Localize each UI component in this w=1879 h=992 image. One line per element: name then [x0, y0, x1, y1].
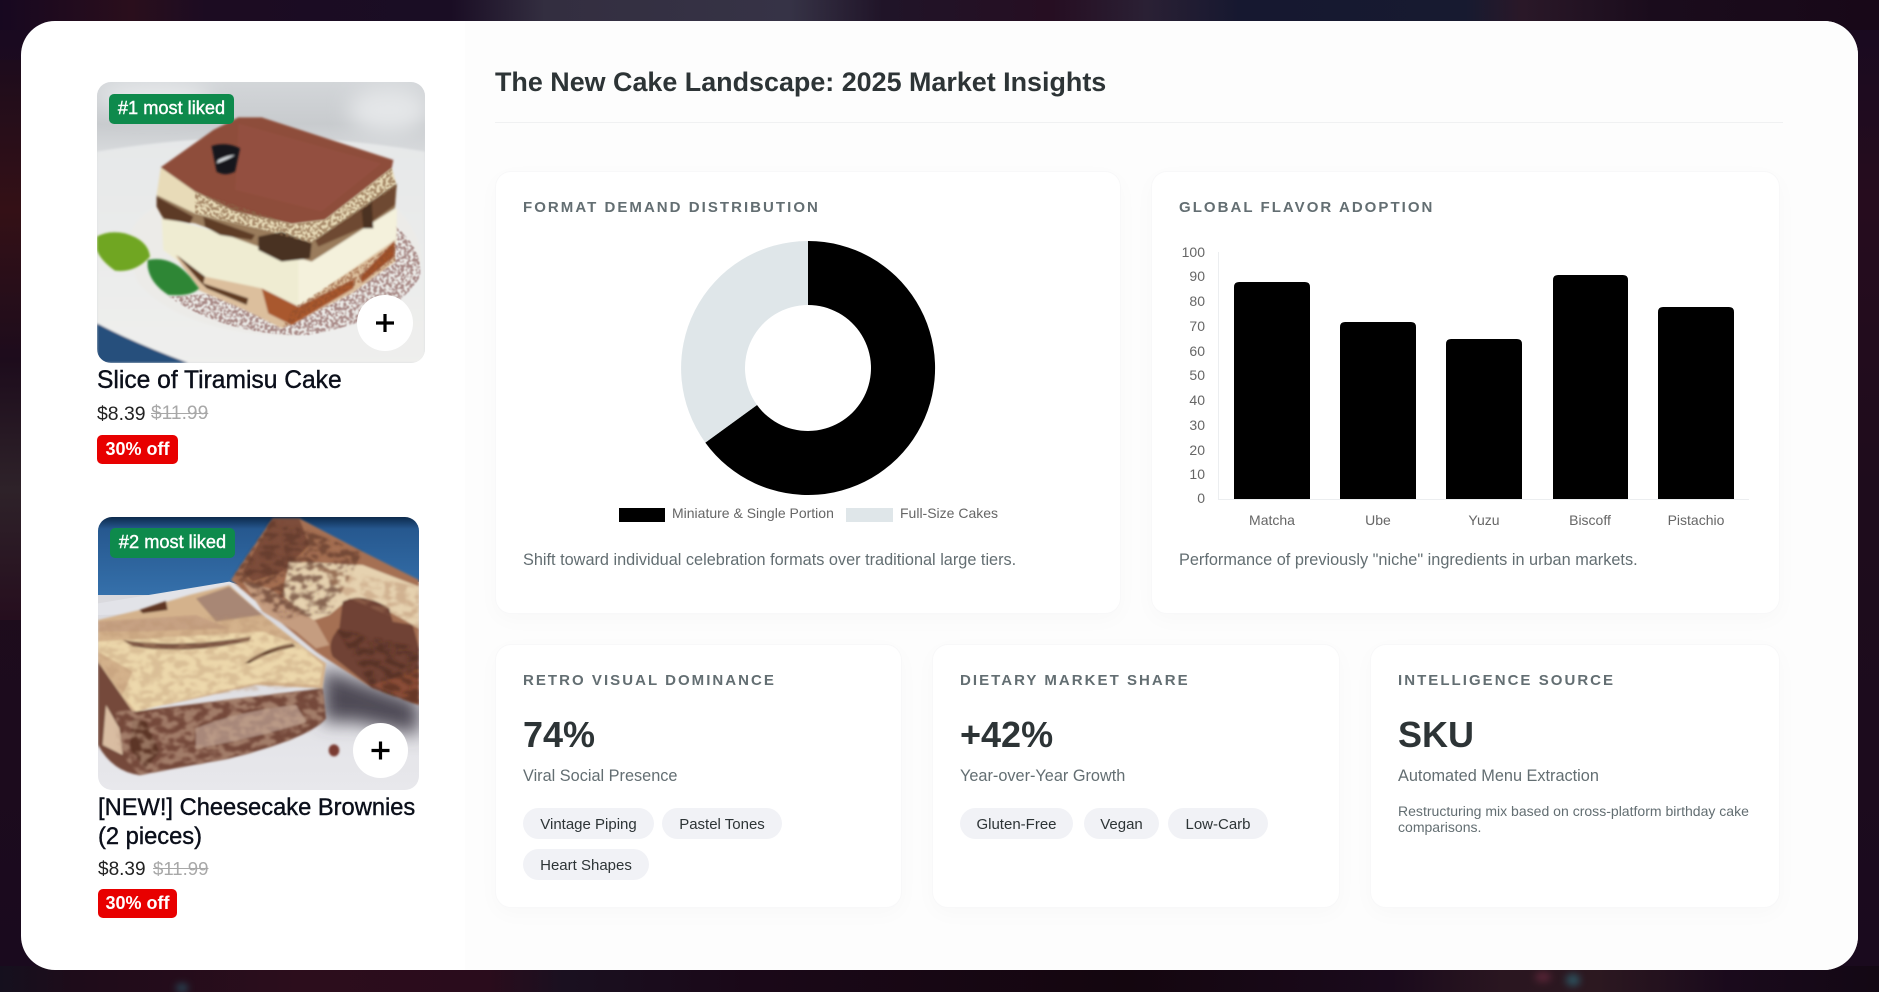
icon: add button	[98, 723, 408, 916]
product name	[98, 795, 415, 850]
ranking badge	[109, 94, 234, 124]
tag: Vintage Piping	[540, 816, 637, 833]
panel: format demand distribution	[495, 171, 1121, 614]
tag	[1084, 808, 1159, 839]
garnish: mint leaves	[97, 232, 150, 271]
y-axis labels: 60	[1189, 343, 1205, 359]
tag: Vegan	[1100, 816, 1143, 833]
sale price: $8.39	[98, 859, 146, 880]
key stat: 74%	[523, 714, 595, 755]
donut chart	[619, 241, 998, 522]
donut segment: full-size	[681, 241, 808, 443]
cake: cocoa top	[161, 117, 393, 224]
source note: Restructuring mix based on cross-platform birthday cake comparisons.	[1398, 803, 1749, 835]
original price: $11.99	[153, 858, 208, 879]
y-axis labels	[1182, 244, 1205, 506]
ranking badge	[110, 528, 235, 558]
panel: intelligence source	[1370, 644, 1780, 908]
brownie: lower front side	[98, 662, 326, 775]
x-axis labels: Matcha	[1249, 512, 1295, 528]
ranking badge: #1 most liked	[118, 98, 225, 118]
y-axis labels: 70	[1189, 318, 1205, 334]
y-axis labels: 0	[1197, 490, 1205, 506]
y-axis labels: 20	[1189, 442, 1205, 458]
discount tag: 30% off	[105, 439, 170, 459]
cocoa dust	[168, 223, 420, 335]
key stat: +42%	[960, 714, 1053, 755]
x-axis labels: Yuzu	[1468, 512, 1500, 528]
tag: Gluten-Free	[976, 816, 1057, 833]
product name: [NEW!] Cheesecake Brownies	[98, 795, 415, 821]
tag	[1168, 808, 1268, 839]
y-axis labels: 30	[1189, 417, 1205, 433]
donut segment: miniature	[705, 241, 935, 495]
key stat: SKU	[1398, 714, 1474, 755]
panel: retro visual dominance	[495, 644, 902, 908]
discount tag	[97, 435, 178, 464]
product card: cheesecake brownies	[98, 517, 419, 918]
tag: Low-Carb	[1185, 816, 1251, 833]
stat description: Viral Social Presence	[523, 767, 677, 785]
brownie: marbled texture	[98, 518, 419, 775]
legend: Miniature & Single Portion	[672, 505, 834, 521]
icon: add button	[357, 295, 413, 351]
x-axis labels	[1249, 512, 1725, 528]
crumbs	[329, 744, 339, 756]
chart caption: Shift toward individual celebration formats over traditional large tiers.	[523, 551, 1016, 569]
tag	[523, 808, 654, 839]
cake: mottled texture	[195, 168, 397, 328]
bars	[1234, 275, 1734, 499]
product name: Slice of Tiramisu Cake	[97, 367, 342, 394]
legend	[619, 505, 998, 522]
bar chart	[1182, 244, 1749, 528]
garnish: coffee bean	[212, 144, 240, 174]
panel heading: GLOBAL FLAVOR ADOPTION	[1179, 199, 1434, 216]
panel heading: RETRO VISUAL DOMINANCE	[523, 672, 776, 689]
x-axis labels: Biscoff	[1569, 512, 1611, 528]
panel: global flavor adoption	[1151, 171, 1780, 614]
y-axis labels: 10	[1189, 466, 1205, 482]
x-axis labels: Pistachio	[1668, 512, 1725, 528]
product card: tiramisu	[97, 82, 425, 595]
product photo: tiramisu slice	[97, 82, 425, 363]
tag	[662, 808, 782, 839]
tag: Pastel Tones	[679, 816, 765, 833]
panel heading: FORMAT DEMAND DISTRIBUTION	[523, 199, 820, 216]
product photo: cheesecake brownies	[98, 517, 419, 790]
y-axis labels: 80	[1189, 293, 1205, 309]
title: The New Cake Landscape: 2025 Market Insights	[495, 67, 1106, 97]
y-axis labels: 100	[1182, 244, 1205, 260]
legend: Full-Size Cakes	[900, 505, 998, 521]
panel: dietary market share	[932, 644, 1340, 908]
stat description: Year-over-Year Growth	[960, 767, 1125, 785]
tag	[523, 849, 649, 880]
panel heading: DIETARY MARKET SHARE	[960, 672, 1190, 689]
ranking badge: #2 most liked	[119, 532, 226, 552]
chart caption: Performance of previously "niche" ingredients in urban markets.	[1179, 551, 1638, 569]
panel heading: INTELLIGENCE SOURCE	[1398, 672, 1615, 689]
cake: ladyfinger layer	[157, 183, 397, 262]
cake: cream middle	[162, 208, 397, 307]
tag	[960, 808, 1073, 839]
discount tag: 30% off	[105, 893, 170, 913]
x-axis labels: Ube	[1365, 512, 1391, 528]
product name: (2 pieces)	[98, 824, 202, 850]
cake: crust base	[175, 240, 395, 328]
brownie: upper piece	[231, 518, 419, 705]
y-axis labels: 50	[1189, 367, 1205, 383]
stat description: Automated Menu Extraction	[1398, 767, 1599, 785]
discount tag	[98, 889, 177, 918]
cake: cream top layer	[157, 167, 397, 243]
sale price: $8.39	[97, 403, 146, 425]
tag: Heart Shapes	[540, 857, 632, 874]
brownie: lower swirl top	[98, 585, 326, 712]
original price: $11.99	[151, 403, 208, 424]
y-axis labels: 90	[1189, 268, 1205, 284]
y-axis labels: 40	[1189, 392, 1205, 408]
